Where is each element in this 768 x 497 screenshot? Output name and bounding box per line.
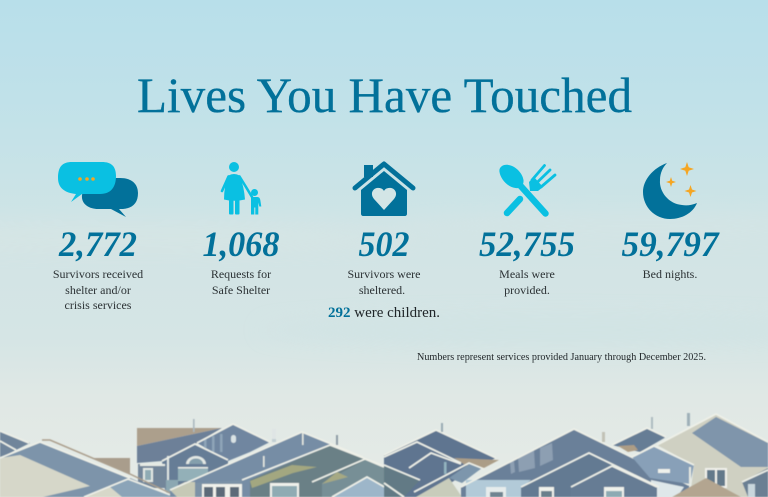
icon: house with heart [355,164,413,216]
stat: shelter and crisis services: crisis services [65,298,132,312]
house: center-right back [384,423,499,497]
stat: requests for safe shelter: Safe Shelter [212,283,270,297]
stat: shelter and crisis services: shelter and/or [65,283,131,297]
icon: crescent moon and stars [643,162,697,219]
number: 52,755: 52,755 [479,224,575,264]
stat: requests for safe shelter [202,162,280,297]
house: bottom right brown roof and corner [672,468,768,497]
house: far left roof [0,431,30,458]
icon: spoon and fork [499,165,555,214]
number: 2,772: 2,772 [58,224,137,264]
stat: shelter and crisis services [53,162,143,312]
stat: survivors sheltered: sheltered. [359,283,405,297]
icon: speech bubbles [58,162,138,217]
house: center-left main [170,429,402,497]
title: Lives You Have Touched [137,67,632,123]
houses photo strip [0,413,768,497]
number: 502: 502 [358,224,410,264]
house: back left with brown roof [93,419,276,497]
label: meals provided: Meals were [499,267,555,281]
house: right tan gable [632,413,768,497]
label: requests for safe shelter: Requests for [211,267,271,281]
stat: meals: provided. [504,283,550,297]
icon: parent and child [222,162,261,214]
house: right back gable [612,417,666,452]
label: bed nights: Bed nights. [643,267,697,281]
number: 1,068: 1,068 [202,224,280,264]
stat: survivors sheltered [328,164,440,321]
stat: bed nights [622,162,720,281]
label: survivors received shelter: Survivors received [53,267,143,281]
house: center-right large gable [461,429,689,497]
stat: meals [479,165,575,297]
house: front left big tan gable [0,440,176,497]
footnote: Numbers represent services provided January through December 2025. [417,352,706,363]
number: 59,797: 59,797 [622,224,720,264]
callout: children: 292 were children. [328,305,440,321]
label: survivors were sheltered: Survivors were [348,267,420,281]
